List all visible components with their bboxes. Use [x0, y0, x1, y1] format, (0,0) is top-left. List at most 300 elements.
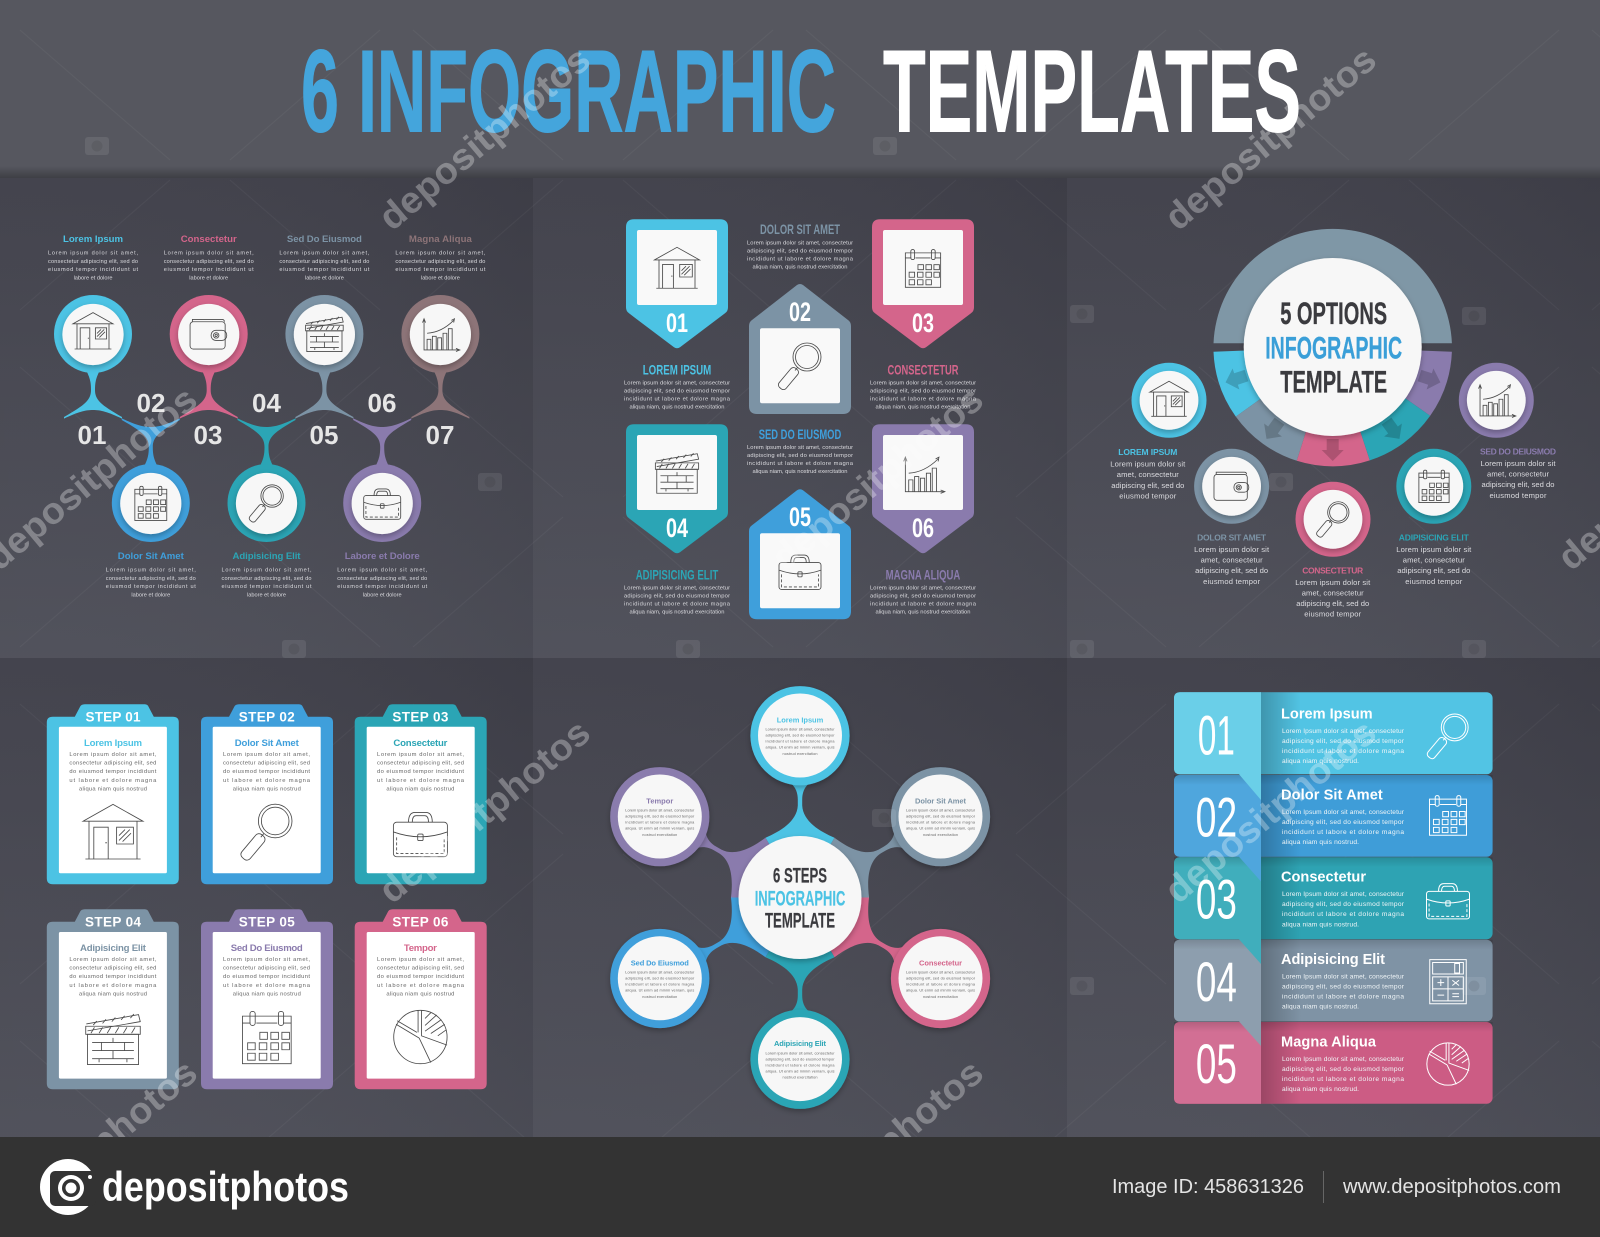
text: Adipisicing Elit: ADIPISICING ELIT	[1399, 532, 1470, 542]
hub center heading: 6 STEPS	[773, 865, 827, 888]
card step 02: Lorem ipsum dolor sit amet,	[223, 752, 310, 758]
step numbers: 07	[426, 420, 454, 450]
text: Magna Aliqua: incididunt ut labore et dolore magna	[870, 602, 977, 608]
text: Adipisicing Elit: ADIPISICING ELIT	[636, 567, 719, 583]
step numbers: 04	[252, 388, 281, 418]
card step 04: Adipisicing Elit	[80, 943, 147, 954]
text: Lorem Ipsum: aliqua niam, quis nostrud exercitation	[630, 405, 724, 411]
card step 05: do eiusmod tempor incididunt	[223, 974, 310, 980]
card step 01: aliqua niam quis nostrud	[79, 786, 147, 792]
card step 03: consectetur adipiscing elit, sed	[377, 760, 464, 766]
text: Labore et Dolore: labore et dolore	[363, 592, 402, 598]
text: Dolor Sit Amet: adipiscing elit, sed do	[1195, 566, 1268, 575]
text: Sed Do Deiusmod: eiusmod tempor	[1490, 491, 1547, 500]
text: Consectetur: CONSECTETUR	[888, 361, 958, 377]
row 03: adipiscing elit, sed do eiusmod tempor	[1282, 901, 1405, 908]
text: Dolor Sit Amet: eiusmod tempor	[1203, 577, 1261, 586]
row 04: aliqua niam quis nostrud.	[1282, 1004, 1359, 1011]
text: Magna Aliqua: labore et dolore	[421, 276, 460, 282]
node: Consectetur: nostrud exercitation	[923, 995, 958, 999]
row 04: Adipisicing Elit	[1281, 952, 1385, 968]
text: Adipisicing Elit: aliqua niam, quis nostrud exercitation	[630, 610, 724, 616]
card step 03: do eiusmod tempor incididunt	[377, 769, 464, 775]
node: Dolor Sit Amet: aliqua. Ut enim ad minim veniam, quis	[906, 827, 975, 831]
footer website: www.depositphotos.com	[1342, 1176, 1561, 1198]
card 05: 05	[789, 502, 811, 532]
panel: five options circle	[1110, 229, 1556, 618]
text: Dolor Sit Amet: eiusmod tempor incididunt ut	[106, 584, 196, 590]
text: Lorem Ipsum: eiusmod tempor	[1119, 492, 1177, 500]
text: Lorem Ipsum: eiusmod tempor incididunt ut	[48, 267, 138, 273]
node: Lorem Ipsum: aliqua. Ut enim ad minim veniam, quis	[766, 746, 835, 750]
card step 04: ut labore et dolore magna	[69, 983, 157, 989]
text: Adipisicing Elit	[624, 567, 731, 616]
text: Dolor Sit Amet	[106, 551, 196, 598]
node: Lorem Ipsum: nostrud exercitation	[782, 752, 818, 756]
row 02: aliqua niam quis nostrud.	[1282, 839, 1359, 846]
text: Lorem Ipsum: LOREM IPSUM	[643, 361, 711, 377]
row 02: incididunt ut labore et dolore magna	[1282, 829, 1404, 836]
node: Tempor: adipiscing elit, sed do eiusmod tempor	[625, 815, 695, 819]
text: Labore et Dolore: Labore et Dolore	[345, 551, 420, 562]
node: Sed Do Eiusmod: aliqua. Ut enim ad minim veniam, quis	[625, 988, 694, 992]
option 4 calendar	[1396, 449, 1471, 524]
node: Adipisicing Elit: adipiscing elit, sed do eiusmod tempor	[766, 1057, 835, 1061]
text: Dolor Sit Amet: Lorem ipsum dolor sit amet,	[106, 568, 196, 574]
card step 02: consectetur adipiscing elit, sed	[223, 760, 310, 766]
text: Consectetur	[1295, 565, 1371, 618]
text: Labore et Dolore: consectetur adipiscing elit, sed do	[337, 576, 427, 582]
text: Sed Do Deiusmod: adipiscing elit, sed do	[1482, 480, 1554, 489]
node: Tempor: aliqua. Ut enim ad minim veniam, quis	[625, 827, 694, 831]
text: Lorem Ipsum	[1110, 447, 1186, 500]
text: Consectetur: aliqua niam, quis nostrud exercitation	[876, 405, 970, 411]
card step 05: STEP 05	[239, 915, 295, 930]
text: Adipisicing Elit: eiusmod tempor incididunt ut	[222, 584, 312, 590]
panel: step cards	[47, 704, 487, 1089]
text: Consectetur: labore et dolore	[189, 276, 228, 282]
node: Consectetur: Lorem ipsum dolor sit amet, consectetur	[906, 970, 976, 974]
node: Lorem Ipsum: incididunt ut labore et dolore magna	[766, 740, 835, 744]
card 06	[872, 424, 974, 553]
row 01	[1174, 692, 1493, 800]
text: Consectetur: eiusmod tempor incididunt ut	[164, 267, 254, 273]
text: Consectetur: Lorem ipsum dolor sit amet,	[164, 250, 254, 256]
text: Sed Do Deiusmod	[1480, 446, 1556, 500]
text: Lorem Ipsum: adipiscing elit, sed do eiusmod tempor	[624, 388, 730, 394]
wave connector	[64, 370, 469, 467]
option 1 house	[1132, 363, 1206, 438]
node: Adipisicing Elit: incididunt ut labore et dolore magna	[766, 1063, 835, 1067]
text: Consectetur: consectetur adipiscing elit, sed do	[164, 259, 254, 265]
row 04: incididunt ut labore et dolore magna	[1282, 994, 1404, 1000]
text: Sed Do Eiusmod	[279, 234, 370, 282]
text: Consectetur: adipiscing elit, sed do eiusmod tempor	[870, 388, 976, 394]
card step 01: STEP 01	[86, 710, 141, 725]
row 03: Lorem Ipsum dolor sit amet, consectetur	[1282, 891, 1405, 898]
card step 04: do eiusmod tempor incididunt	[69, 974, 157, 980]
node: Sed Do Eiusmod	[610, 929, 709, 1028]
row 05: Magna Aliqua	[1281, 1034, 1377, 1050]
node: Dolor Sit Amet	[891, 767, 990, 866]
node: Adipisicing Elit: nostrud exercitation	[782, 1076, 818, 1080]
card 04	[626, 424, 728, 553]
card step 04: consectetur adipiscing elit, sed	[69, 966, 156, 972]
row 03: incididunt ut labore et dolore magna	[1282, 911, 1404, 918]
row 01: adipiscing elit, sed do eiusmod tempor	[1282, 738, 1405, 745]
card step 02: aliqua niam quis nostrud	[233, 786, 301, 792]
node: Lorem Ipsum: adipiscing elit, sed do eiusmod tempor	[766, 734, 835, 738]
watermark overlay: depositphotos	[764, 378, 991, 578]
text: Labore et Dolore: Lorem ipsum dolor sit amet,	[337, 568, 428, 574]
panel background: row 2 column 1	[0, 658, 533, 1137]
node: Dolor Sit Amet: nostrud exercitation	[923, 833, 958, 837]
text: Adipisicing Elit	[222, 551, 312, 598]
row 05: adipiscing elit, sed do eiusmod tempor	[1282, 1066, 1405, 1073]
row 03	[1174, 857, 1493, 964]
node: Tempor: nostrud exercitation	[642, 833, 677, 837]
node: Consectetur	[891, 929, 990, 1028]
card step 03: ut labore et dolore magna	[377, 778, 465, 784]
center circle with heading: 5 OPTIONS	[1280, 295, 1387, 331]
text: Dolor Sit Amet: aliqua niam, quis nostrud exercitation	[752, 265, 848, 271]
text: Sed Do Eiusmod: Lorem ipsum dolor sit amet,	[279, 250, 370, 256]
card 02	[749, 284, 851, 414]
row 01: Lorem Ipsum	[1281, 706, 1373, 722]
card step 05	[201, 909, 333, 1089]
text: Labore et Dolore	[337, 551, 428, 598]
footer logo	[40, 1159, 349, 1215]
title: TEMPLATES	[883, 26, 1301, 156]
text: Consectetur: adipiscing elit, sed do	[1296, 599, 1369, 608]
hub spokes	[684, 784, 916, 1012]
text: Lorem Ipsum	[48, 234, 138, 282]
row 01: incididunt ut labore et dolore magna	[1282, 748, 1404, 755]
node: Dolor Sit Amet: incididunt ut labore et dolore magna	[906, 821, 976, 825]
text: Dolor Sit Amet: amet, consectetur	[1201, 556, 1263, 564]
text: Consectetur: Lorem ipsum dolor sit amet, consectetur	[870, 380, 976, 386]
footer image id: Image ID: 458631326	[1112, 1176, 1304, 1198]
text: Consectetur	[164, 234, 254, 282]
step numbers: 06	[368, 388, 396, 418]
card step 02: Dolor Sit Amet	[235, 738, 300, 749]
card step 05: ut labore et dolore magna	[223, 983, 311, 989]
step 3 wallet	[170, 295, 248, 373]
text: Labore et Dolore: eiusmod tempor incididunt ut	[337, 584, 428, 590]
text: Consectetur: eiusmod tempor	[1304, 610, 1362, 618]
text: Sed Do Eiusmod: incididunt ut labore et dolore magna	[747, 461, 854, 467]
text: Adipisicing Elit: labore et dolore	[247, 592, 286, 598]
step 5 clapper	[285, 295, 363, 373]
card step 01	[47, 704, 179, 884]
card step 05: consectetur adipiscing elit, sed	[223, 966, 310, 972]
node: Consectetur: adipiscing elit, sed do eiusmod tempor	[906, 976, 976, 980]
node: Consectetur: aliqua. Ut enim ad minim veniam, quis	[906, 988, 975, 992]
card step 06	[355, 909, 487, 1089]
card 01: 01	[666, 308, 688, 338]
panel: six arrow shaped cards	[624, 219, 977, 619]
header band	[0, 0, 1600, 178]
card step 05: Sed Do Eiusmod	[231, 943, 303, 954]
card step 06: do eiusmod tempor incididunt	[377, 974, 464, 980]
text: Consectetur: Lorem ipsum dolor sit	[1295, 578, 1371, 587]
row 05: 05	[1196, 1032, 1237, 1095]
card step 05: aliqua niam quis nostrud	[233, 992, 301, 998]
text: Sed Do Eiusmod: adipiscing elit, sed do eiusmod tempor	[747, 453, 853, 459]
node: Sed Do Eiusmod: Sed Do Eiusmod	[631, 958, 689, 967]
text: Adipisicing Elit: amet, consectetur	[1403, 556, 1465, 564]
row 03: Consectetur	[1281, 870, 1366, 886]
text: Adipisicing Elit: incididunt ut labore et dolore magna	[624, 602, 731, 608]
card step 03	[355, 704, 487, 884]
row 05: incididunt ut labore et dolore magna	[1282, 1076, 1404, 1083]
step 2 calendar	[112, 464, 190, 542]
card step 06: aliqua niam quis nostrud	[386, 992, 454, 998]
card step 04: STEP 04	[85, 915, 141, 930]
step numbers	[78, 388, 454, 450]
hub center heading	[738, 836, 862, 959]
step numbers: 03	[194, 420, 222, 450]
text: Sed Do Eiusmod	[747, 426, 854, 475]
text: Dolor Sit Amet: Lorem ipsum dolor sit amet, consectetur	[747, 240, 853, 246]
watermark overlay: depositphotos	[371, 711, 598, 911]
footer logo: depositphotos	[102, 1163, 349, 1210]
card step 02: do eiusmod tempor incididunt	[223, 769, 310, 775]
node: Adipisicing Elit	[750, 1010, 850, 1109]
node: Dolor Sit Amet: Dolor Sit Amet	[915, 796, 966, 806]
text: Magna Aliqua: Lorem ipsum dolor sit amet, consectetur	[870, 586, 976, 592]
text: Consectetur: Consectetur	[181, 234, 237, 245]
text: Adipisicing Elit: adipiscing elit, sed do	[1397, 566, 1470, 575]
card step 02	[201, 704, 333, 884]
text: Lorem Ipsum: amet, consectetur	[1117, 470, 1179, 479]
text: Magna Aliqua: adipiscing elit, sed do eiusmod tempor	[870, 594, 976, 600]
card step 01: Lorem ipsum dolor sit amet,	[69, 752, 157, 758]
card step 04: Lorem ipsum dolor sit amet,	[69, 957, 157, 963]
hub center heading: INFOGRAPHIC	[755, 888, 845, 911]
row 02: Dolor Sit Amet	[1281, 788, 1383, 804]
text: Lorem Ipsum: Lorem ipsum dolor sit amet,	[48, 250, 138, 256]
text: Sed Do Eiusmod: labore et dolore	[305, 276, 344, 282]
text: Consectetur	[870, 361, 977, 411]
card step 01: ut labore et dolore magna	[69, 778, 157, 784]
text: Adipisicing Elit: Lorem ipsum dolor sit amet, consectetur	[624, 586, 730, 592]
text: Magna Aliqua: Magna Aliqua	[409, 234, 473, 245]
text: Consectetur: amet, consectetur	[1302, 588, 1364, 598]
row 01: aliqua niam quis nostrud.	[1282, 758, 1359, 765]
row 02: Lorem Ipsum dolor sit amet, consectetur	[1282, 809, 1405, 816]
text: Consectetur: CONSECTETUR	[1302, 565, 1363, 575]
card step 01: consectetur adipiscing elit, sed	[69, 760, 156, 766]
text: Magna Aliqua	[870, 567, 977, 616]
card step 02: ut labore et dolore magna	[223, 778, 311, 784]
card step 05: Lorem ipsum dolor sit amet,	[223, 957, 310, 963]
node: Sed Do Eiusmod: nostrud exercitation	[642, 995, 677, 999]
card step 04	[47, 909, 179, 1089]
card 04: 04	[666, 513, 688, 543]
node: Consectetur: incididunt ut labore et dolore magna	[906, 982, 976, 986]
text: Adipisicing Elit: Adipisicing Elit	[232, 551, 301, 562]
node: Sed Do Eiusmod: incididunt ut labore et dolore magna	[625, 982, 695, 986]
node: Lorem Ipsum	[750, 686, 850, 785]
card 03: 03	[912, 308, 934, 338]
text: Adipisicing Elit: Lorem ipsum dolor sit amet,	[222, 568, 312, 574]
node: Sed Do Eiusmod: Lorem ipsum dolor sit amet, consectetur	[625, 970, 695, 974]
watermark overlay: depositphotos	[371, 38, 598, 238]
node: Sed Do Eiusmod: adipiscing elit, sed do eiusmod tempor	[625, 976, 695, 980]
center circle with heading	[1244, 258, 1422, 436]
card 05	[749, 489, 851, 619]
node: Tempor	[610, 767, 709, 866]
card step 06: ut labore et dolore magna	[377, 983, 465, 989]
text: Adipisicing Elit: adipiscing elit, sed do eiusmod tempor	[624, 594, 730, 600]
text: Consectetur: incididunt ut labore et dolore magna	[870, 396, 977, 402]
card step 01: Lorem Ipsum	[84, 738, 142, 749]
step numbers: 01	[78, 420, 106, 450]
row 04: adipiscing elit, sed do eiusmod tempor	[1282, 984, 1405, 990]
text: Sed Do Eiusmod: eiusmod tempor incididunt ut	[279, 267, 370, 273]
text: Dolor Sit Amet: DOLOR SIT AMET	[1197, 532, 1267, 542]
step 4 magnifier	[228, 464, 306, 542]
row 02	[1174, 775, 1493, 882]
card step 03: STEP 03	[392, 710, 449, 725]
text: Sed Do Eiusmod: consectetur adipiscing elit, sed do	[279, 259, 369, 265]
text: Sed Do Eiusmod: Lorem ipsum dolor sit amet, consectetur	[747, 445, 853, 451]
card step 01: do eiusmod tempor incididunt	[69, 769, 157, 775]
node: Tempor: incididunt ut labore et dolore magna	[625, 821, 695, 825]
card step 06: Tempor	[404, 943, 437, 954]
panel: six steps hub diagram	[610, 686, 990, 1109]
watermark overlay: depositphotos	[1157, 711, 1384, 911]
panel: stacked numbered rows	[1174, 692, 1493, 1104]
text: Dolor Sit Amet: DOLOR SIT AMET	[760, 221, 840, 237]
panel: seven step wave timeline	[48, 234, 486, 598]
title: 6 INFOGRAPHIC	[301, 26, 836, 156]
step 7 chart	[401, 295, 479, 373]
option 5 chart	[1459, 363, 1534, 438]
step numbers: 02	[137, 388, 165, 418]
row 03: aliqua niam quis nostrud.	[1282, 921, 1359, 928]
text: Lorem Ipsum: Lorem Ipsum	[63, 234, 123, 245]
node: Lorem Ipsum: Lorem Ipsum	[777, 716, 824, 724]
text: Magna Aliqua: consectetur adipiscing elit, sed do	[395, 259, 485, 265]
row 04	[1174, 940, 1493, 1046]
text: Lorem Ipsum: Lorem ipsum dolor sit	[1110, 460, 1186, 468]
card step 03: Lorem ipsum dolor sit amet,	[377, 752, 464, 758]
text: Sed Do Deiusmod: SED DO DEIUSMOD	[1480, 446, 1556, 456]
card step 04: aliqua niam quis nostrud	[79, 992, 147, 998]
hub center heading: TEMPLATE	[765, 910, 835, 933]
node: Dolor Sit Amet: adipiscing elit, sed do eiusmod tempor	[906, 815, 976, 819]
node: Adipisicing Elit: aliqua. Ut enim ad minim veniam, quis	[766, 1069, 835, 1073]
node: Adipisicing Elit: Adipisicing Elit	[774, 1039, 826, 1048]
text: Lorem Ipsum	[624, 361, 731, 411]
option 2 wallet	[1194, 449, 1269, 524]
panel background: row 1 column 2	[533, 178, 1067, 658]
text: Dolor Sit Amet: incididunt ut labore et dolore magna	[747, 256, 854, 262]
row 03: 03	[1196, 868, 1237, 931]
row 05	[1174, 1022, 1493, 1104]
text: Magna Aliqua: aliqua niam, quis nostrud exercitation	[876, 610, 970, 616]
text: Dolor Sit Amet: Lorem ipsum dolor sit	[1194, 545, 1270, 554]
node: Adipisicing Elit: Lorem ipsum dolor sit amet, consectetur	[766, 1051, 835, 1055]
node: Tempor: Tempor	[646, 796, 673, 806]
text: Adipisicing Elit	[1396, 532, 1472, 586]
node: Tempor: Lorem ipsum dolor sit amet, consectetur	[625, 809, 695, 813]
row 01: 01	[1198, 703, 1235, 766]
text: Magna Aliqua: eiusmod tempor incididunt ut	[395, 267, 486, 273]
card step 03: aliqua niam quis nostrud	[386, 786, 454, 792]
text: Adipisicing Elit: consectetur adipiscing elit, sed do	[222, 576, 312, 582]
node: Consectetur: Consectetur	[919, 958, 962, 967]
card step 06: consectetur adipiscing elit, sed	[377, 966, 464, 972]
watermark overlay: depositphotos	[1157, 38, 1384, 238]
text: Dolor Sit Amet: consectetur adipiscing elit, sed do	[106, 576, 196, 582]
card 01	[626, 219, 728, 348]
ring arrows	[1222, 365, 1444, 461]
text: Lorem Ipsum: adipiscing elit, sed do	[1111, 481, 1184, 490]
card 02: 02	[789, 297, 811, 327]
text: Lorem Ipsum: labore et dolore	[74, 276, 112, 282]
card 06: 06	[912, 513, 934, 543]
row 04: Lorem Ipsum dolor sit amet, consectetur	[1282, 974, 1405, 980]
footer bar	[0, 1137, 1600, 1237]
text: Lorem Ipsum: Lorem ipsum dolor sit amet, consectetur	[624, 380, 730, 386]
text: Adipisicing Elit: Lorem ipsum dolor sit	[1396, 545, 1472, 554]
panel background: row 1 column 1	[0, 178, 533, 658]
row 02: 02	[1196, 786, 1237, 849]
text: Sed Do Eiusmod: SED DO EIUSMOD	[759, 426, 841, 442]
panel background: row 2 column 3	[1067, 658, 1600, 1137]
text: Magna Aliqua	[395, 234, 486, 282]
card step 03: Consectetur	[393, 738, 448, 749]
step 1 house	[54, 295, 132, 373]
card step 06: STEP 06	[392, 915, 449, 930]
row 02: adipiscing elit, sed do eiusmod tempor	[1282, 819, 1405, 826]
center circle with heading: INFOGRAPHIC	[1265, 329, 1402, 365]
card step 06: Lorem ipsum dolor sit amet,	[377, 957, 464, 963]
text: Magna Aliqua: Lorem ipsum dolor sit amet,	[395, 250, 486, 256]
text: Lorem Ipsum: incididunt ut labore et dolore magna	[624, 396, 731, 402]
text: Sed Do Eiusmod: aliqua niam, quis nostrud exercitation	[752, 469, 848, 475]
row 05: Lorem Ipsum dolor sit amet, consectetur	[1282, 1056, 1405, 1063]
panel background: row 1 column 3	[1067, 178, 1600, 658]
step 6 briefcase	[343, 464, 421, 542]
text: Dolor Sit Amet: adipiscing elit, sed do eiusmod tempor	[747, 248, 853, 254]
text: Sed Do Eiusmod: Sed Do Eiusmod	[287, 234, 362, 245]
text: Adipisicing Elit: eiusmod tempor	[1405, 577, 1463, 586]
text: Dolor Sit Amet: Dolor Sit Amet	[118, 551, 185, 562]
row 05: aliqua niam quis nostrud.	[1282, 1086, 1359, 1093]
text: Lorem Ipsum: LOREM IPSUM	[1118, 447, 1177, 457]
panel background: row 2 column 2	[533, 658, 1067, 1137]
row 01: Lorem Ipsum dolor sit amet, consectetur	[1282, 728, 1405, 735]
text: Sed Do Deiusmod: Lorem ipsum dolor sit	[1480, 459, 1556, 468]
row 04: 04	[1196, 950, 1237, 1013]
node: Lorem Ipsum: Lorem ipsum dolor sit amet, consectetur	[766, 728, 835, 732]
card step 02: STEP 02	[239, 710, 295, 725]
center circle with heading: TEMPLATE	[1280, 364, 1387, 400]
node: Dolor Sit Amet: Lorem ipsum dolor sit amet, consectetur	[906, 809, 976, 813]
text: Lorem Ipsum: consectetur adipiscing elit, sed do	[48, 259, 138, 265]
text: Sed Do Deiusmod: amet, consectetur	[1487, 470, 1549, 478]
text: Dolor Sit Amet	[1194, 532, 1270, 586]
text: Dolor Sit Amet: labore et dolore	[131, 592, 170, 598]
text: Dolor Sit Amet	[747, 221, 854, 271]
option 3 magnifier	[1296, 482, 1370, 557]
step numbers: 05	[310, 420, 338, 450]
ring segments	[1214, 229, 1452, 466]
